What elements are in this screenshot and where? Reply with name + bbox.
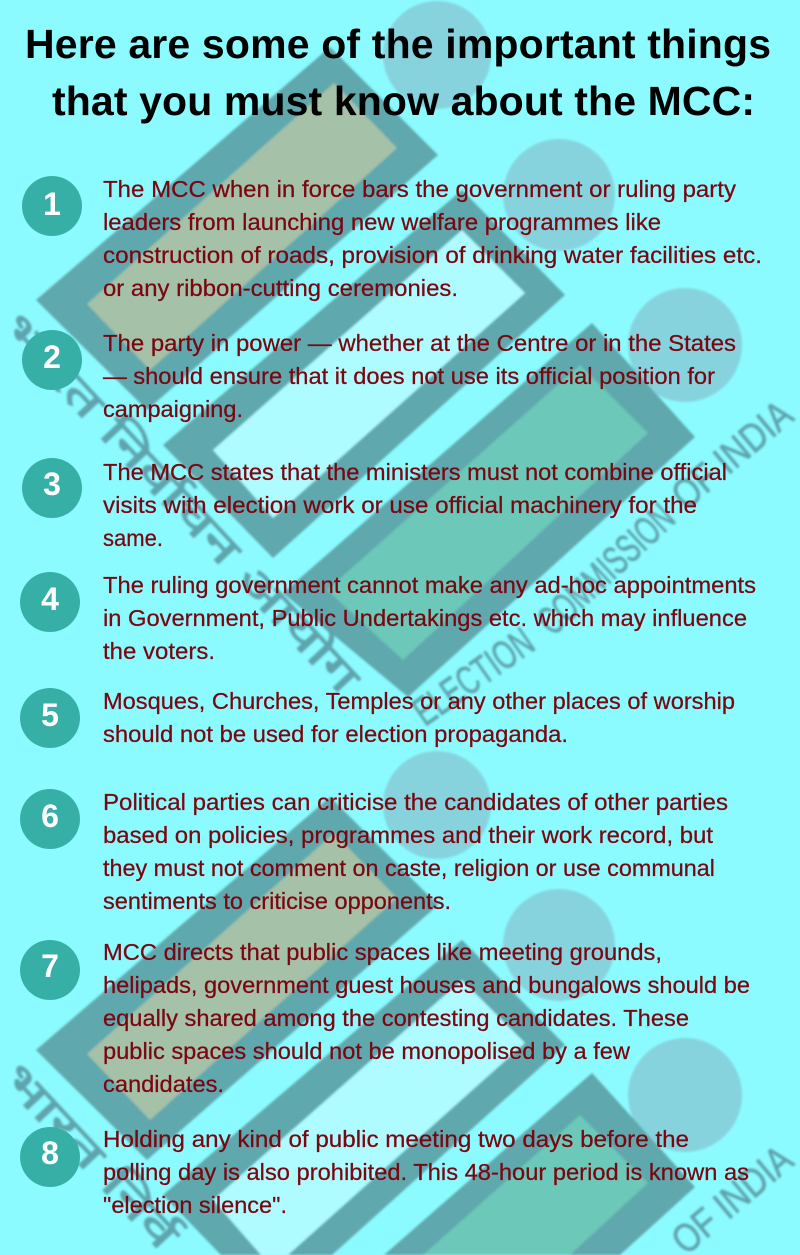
badge 5: 5 bbox=[41, 697, 59, 733]
badge 3 bbox=[22, 458, 82, 518]
text 5 bbox=[103, 688, 735, 747]
title: that you must know about the MCC: bbox=[52, 78, 755, 124]
watermark: election commission logo, upper tile: ELECTION bbox=[405, 620, 542, 734]
badge 7 bbox=[20, 940, 80, 1000]
badge 5 bbox=[20, 688, 80, 748]
watermark: election commission logo, lower tile bbox=[0, 751, 800, 1255]
text 1: construction of roads, provision of drinking water facilities etc. bbox=[103, 242, 762, 268]
text 7: helipads, government guest houses and bungalows should be bbox=[103, 972, 750, 998]
badge 6: 6 bbox=[41, 798, 59, 834]
text 7: equally shared among the contesting candidates. These bbox=[103, 1005, 689, 1031]
text 5: Mosques, Churches, Temples or any other places of worship bbox=[103, 688, 735, 714]
text 8: polling day is also prohibited. This 48-hour period is known as bbox=[103, 1159, 749, 1185]
text 7 bbox=[103, 939, 750, 1097]
text 2 bbox=[103, 330, 736, 422]
text 6: they must not comment on caste, religion or use communal bbox=[103, 855, 715, 881]
text 8: "election silence". bbox=[103, 1192, 287, 1218]
item 8 bbox=[20, 1126, 749, 1218]
item 2 bbox=[22, 330, 736, 422]
text 1: leaders from launching new welfare programmes like bbox=[103, 209, 661, 235]
item 5 bbox=[20, 688, 735, 748]
text 3: same. bbox=[103, 525, 163, 551]
text 1 bbox=[103, 176, 762, 301]
text 1: or any ribbon-cutting ceremonies. bbox=[103, 275, 458, 301]
text 3 bbox=[103, 459, 727, 551]
badge 2: 2 bbox=[43, 339, 61, 375]
badge 1: 1 bbox=[43, 186, 61, 222]
text 7: candidates. bbox=[103, 1071, 224, 1097]
item 6 bbox=[20, 789, 728, 914]
text 2: The party in power — whether at the Centre or in the States bbox=[103, 330, 736, 356]
text 4: The ruling government cannot make any ad-hoc appointments bbox=[103, 572, 756, 598]
item 3 bbox=[22, 458, 727, 551]
watermark: election commission logo, upper tile: COMMISSION bbox=[529, 495, 683, 644]
badge 6 bbox=[20, 789, 80, 849]
watermark: election commission logo, upper tile bbox=[0, 1, 800, 734]
title bbox=[25, 21, 771, 124]
text 6 bbox=[103, 789, 728, 914]
text 4 bbox=[103, 572, 756, 664]
text 3: The MCC states that the ministers must not combine official bbox=[103, 459, 727, 485]
badge 4: 4 bbox=[41, 581, 59, 617]
text 2: campaigning. bbox=[103, 396, 243, 422]
badge 2 bbox=[22, 330, 82, 390]
badge 8: 8 bbox=[41, 1135, 59, 1171]
item 7 bbox=[20, 939, 750, 1097]
badge 7: 7 bbox=[41, 948, 59, 984]
text 4: the voters. bbox=[103, 638, 215, 664]
badge 1 bbox=[22, 176, 82, 236]
text 5: should not be used for election propaganda. bbox=[103, 721, 568, 747]
badge 8 bbox=[20, 1127, 80, 1187]
text 8: Holding any kind of public meeting two days before the bbox=[103, 1126, 689, 1152]
text 6: based on policies, programmes and their work record, but bbox=[103, 822, 714, 848]
text 8 bbox=[103, 1126, 749, 1218]
text 2: — should ensure that it does not use its official position for bbox=[103, 363, 715, 389]
text 3: visits with election work or use official machinery for the bbox=[103, 492, 697, 518]
text 4: in Government, Public Undertakings etc. which may influence bbox=[103, 605, 747, 631]
text 7: public spaces should not be monopolised by a few bbox=[103, 1038, 630, 1064]
item 1 bbox=[22, 176, 762, 301]
title: Here are some of the important things bbox=[25, 21, 771, 67]
watermark: election commission logo, upper tile: भारत निर्वाचन आयोग bbox=[0, 304, 370, 703]
badge 4 bbox=[20, 572, 80, 632]
text 6: sentiments to criticise opponents. bbox=[103, 888, 451, 914]
badge 3: 3 bbox=[43, 466, 61, 502]
text 1: The MCC when in force bars the government or ruling party bbox=[103, 176, 737, 202]
text 6: Political parties can criticise the candidates of other parties bbox=[103, 789, 728, 815]
item 4 bbox=[20, 572, 756, 664]
text 7: MCC directs that public spaces like meeting grounds, bbox=[103, 939, 662, 965]
